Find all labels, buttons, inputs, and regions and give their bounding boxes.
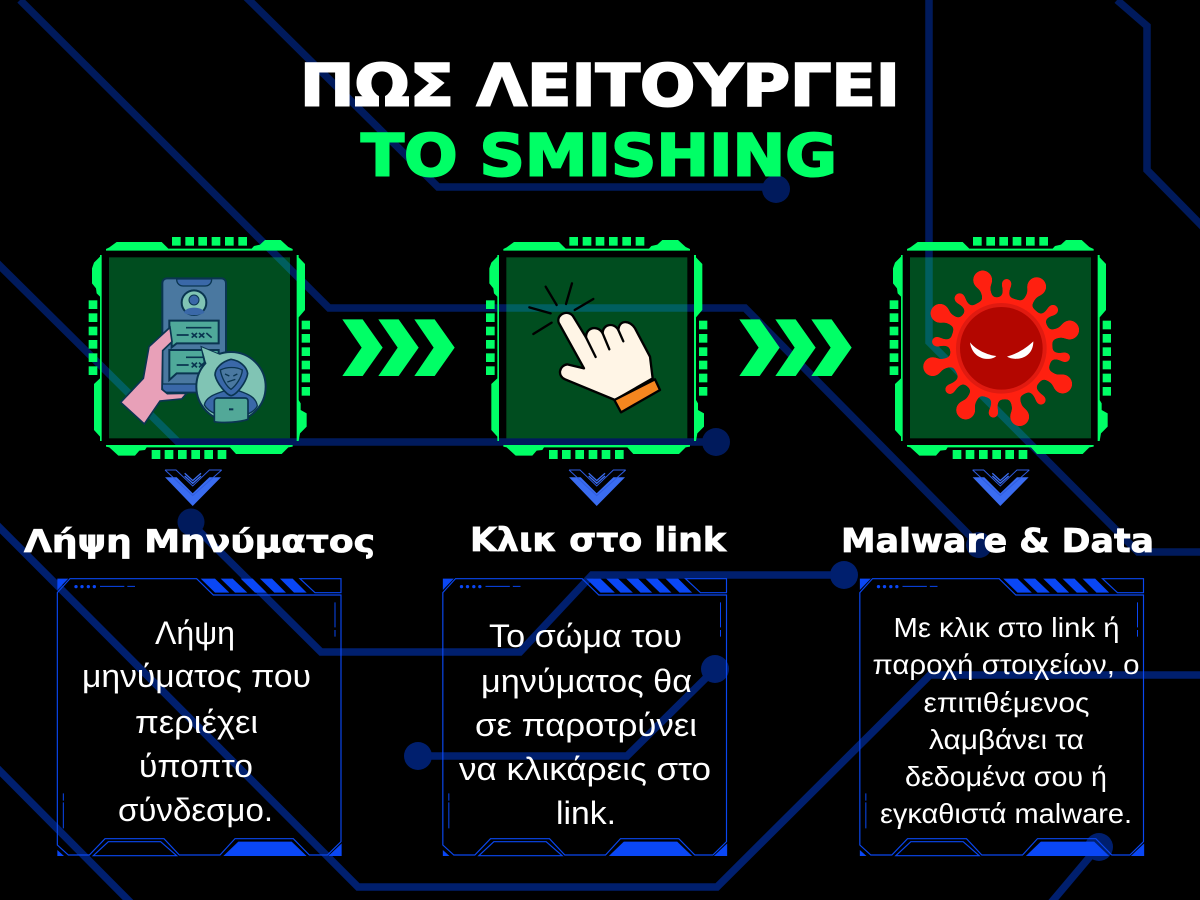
text block: step 3: λαμβάνει τα xyxy=(929,724,1084,755)
text block: step 1: Λήψη xyxy=(155,615,235,651)
text block: step 1: ύποπτο xyxy=(139,748,253,784)
icon: pointing hand click xyxy=(529,283,660,412)
text block: step 1: μηνύματος που xyxy=(82,658,311,694)
text block: step 2: link. xyxy=(556,795,616,831)
icon: phone with message and hacker xyxy=(121,278,266,424)
text block: step 1: περιέχει xyxy=(135,704,258,740)
arrow: step 1 to step 2 xyxy=(342,319,455,376)
title: ΠΩΣ ΛΕΙΤΟΥΡΓΕΙ xyxy=(300,52,900,120)
title xyxy=(300,52,900,190)
text block: step 2: Το σώμα του xyxy=(489,618,682,654)
title: TO SMISHING xyxy=(361,122,837,190)
text block: step 1 xyxy=(82,615,311,828)
text block: step 3: Με κλικ στο link ή xyxy=(894,612,1120,643)
text block: step 2: να κλικάρεις στο xyxy=(459,751,711,787)
down chevron 1 xyxy=(165,470,222,506)
panel: step 2 description xyxy=(443,579,727,856)
step 2 frame and icon xyxy=(486,237,707,459)
text block: step 1: σύνδεσμο. xyxy=(118,792,273,828)
heading: step 3: Malware & Data xyxy=(841,521,1154,560)
icon: red virus with angry eyes xyxy=(923,271,1079,426)
heading: step 2: Κλικ στο link xyxy=(470,520,727,559)
arrow: step 2 to step 3 xyxy=(739,319,852,376)
panel: step 1 description xyxy=(57,579,342,856)
step 1 frame and icon xyxy=(89,237,310,459)
down chevron 2 xyxy=(569,470,626,506)
text block: step 3: εγκαθιστά malware. xyxy=(880,798,1132,829)
panel: step 3 description xyxy=(860,579,1144,856)
heading: step 1: Λήψη Μηνύματος xyxy=(24,524,375,560)
text block: step 2: σε παροτρύνει xyxy=(475,707,697,743)
text block: step 3: δεδομένα σου ή xyxy=(905,761,1107,792)
step 3 frame and icon xyxy=(890,237,1111,459)
text block: step 3 xyxy=(872,612,1140,829)
text block: step 3: επιτιθέμενος xyxy=(924,687,1090,718)
text block: step 3: παροχή στοιχείων, ο xyxy=(872,649,1140,680)
text block: step 2: μηνύματος θα xyxy=(481,663,692,699)
down chevron 3 xyxy=(973,470,1029,506)
text block: step 2 xyxy=(459,618,711,831)
